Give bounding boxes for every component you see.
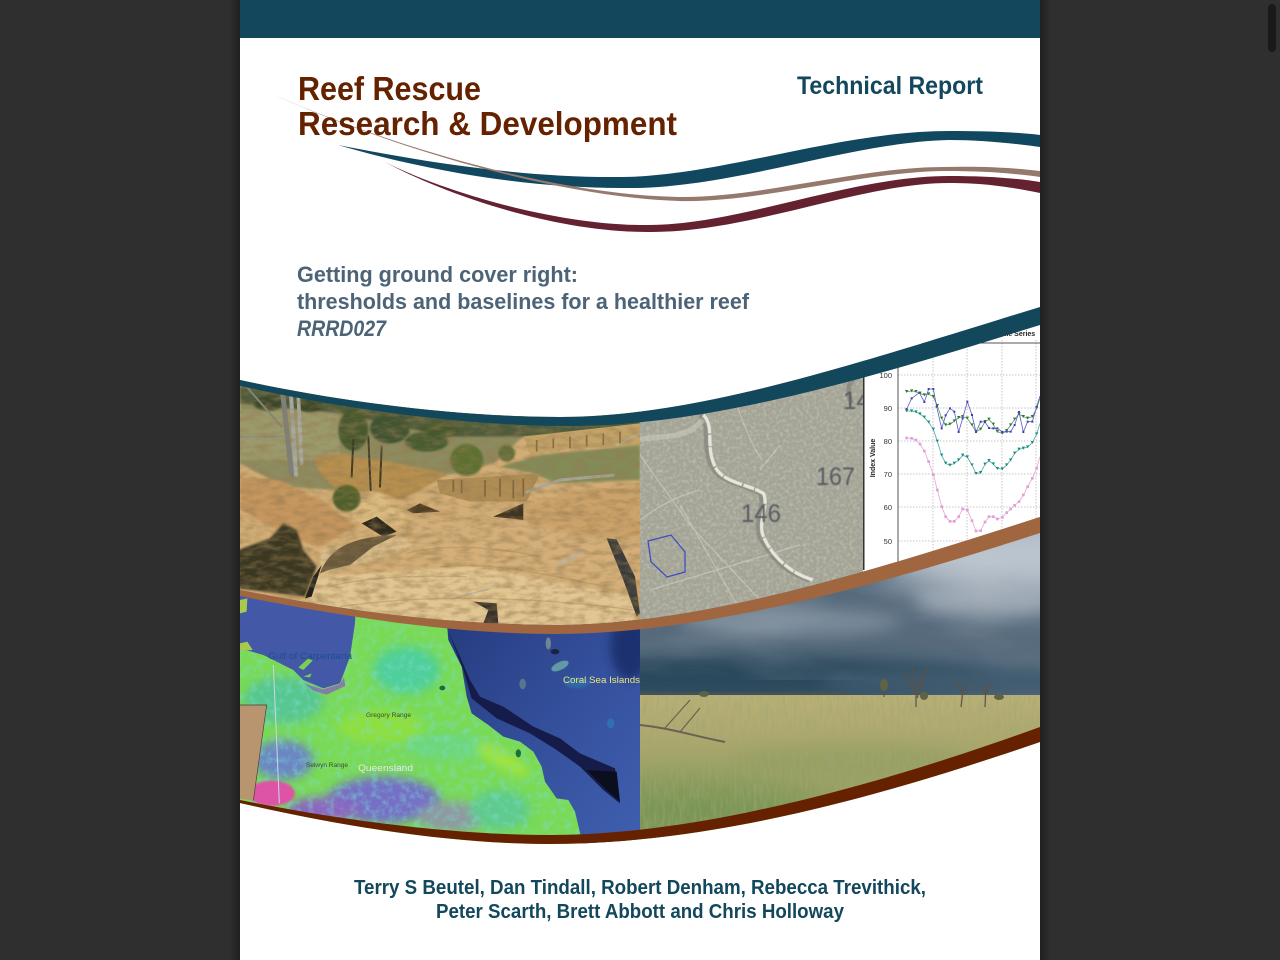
- map labels: Selwyn Range: [306, 763, 349, 769]
- map labels: Gregory Range: [366, 713, 412, 719]
- map labels: [268, 651, 641, 773]
- title: [298, 70, 677, 142]
- report subtitle: RRRD027: [297, 316, 388, 341]
- white page: [240, 0, 1040, 960]
- title: Reef Rescue: [298, 70, 481, 107]
- chart: index value time series: [863, 330, 1040, 570]
- scrollbar thumb: [1268, 4, 1276, 52]
- dead trunks and branches: [240, 385, 640, 598]
- chart: index value time series: 90: [884, 404, 892, 413]
- teal ribbon band: [240, 307, 1040, 426]
- top header bar: [240, 0, 1040, 38]
- sparse trees on the horizon: [884, 666, 992, 707]
- sea to the east: [446, 620, 640, 844]
- decorative ribbon swooshes: [272, 94, 1040, 232]
- chart: index value time series: Index Value: [870, 439, 877, 477]
- authors: Terry S Beutel, Dan Tindall, Robert Denham, Rebecca Trevithick,: [354, 877, 926, 899]
- photo: aerial image: [640, 300, 870, 640]
- blue site polygon: [648, 535, 685, 577]
- photo collage: [240, 330, 1040, 844]
- chart: index value time series: 70: [884, 470, 892, 479]
- dark green pockets: [439, 686, 445, 690]
- map labels: 146: [741, 500, 781, 528]
- chart: index value time series: 60: [884, 503, 892, 512]
- map labels: Queensland: [358, 763, 413, 773]
- map labels: [742, 391, 863, 522]
- map labels: 14: [843, 387, 870, 415]
- trees: [253, 396, 515, 512]
- report subtitle: [297, 262, 750, 341]
- map labels: Coral Sea Islands: [563, 675, 641, 685]
- authors: [354, 877, 926, 923]
- gully channels: [453, 432, 620, 498]
- page shadow: [234, 0, 1046, 960]
- dark pit and log: [362, 517, 397, 537]
- desert inset: [238, 705, 267, 801]
- shadow at lower left: [238, 523, 317, 597]
- chart: index value time series: 100: [879, 371, 892, 380]
- border line: [273, 665, 279, 803]
- title: Research & Development: [298, 105, 677, 142]
- fallen branch: [640, 700, 725, 742]
- chart: index value time series: 80: [884, 437, 892, 446]
- photo: storm over grassland: [640, 342, 1040, 840]
- chart: index value time series: Time Series: [996, 331, 1035, 338]
- strata lines: [327, 547, 633, 610]
- soft colour patches: [243, 647, 533, 832]
- authors: Peter Scarth, Brett Abbott and Chris Holloway: [436, 901, 845, 923]
- report subtitle: Getting ground cover right:: [297, 262, 578, 287]
- dark brown ribbon band: [240, 727, 1040, 844]
- photo: eroded gully: [238, 370, 640, 640]
- report subtitle: thresholds and baselines for a healthier reef: [297, 289, 750, 314]
- satellite map of Queensland: [238, 585, 650, 850]
- map labels: Gulf of Carpentaria: [268, 651, 353, 662]
- gulf of Carpentaria: [238, 587, 357, 688]
- report type label: Technical Report: [797, 72, 984, 100]
- brown ribbon band: [240, 517, 1040, 634]
- chart: index value time series: 50: [884, 537, 892, 546]
- map labels: 167: [816, 463, 855, 491]
